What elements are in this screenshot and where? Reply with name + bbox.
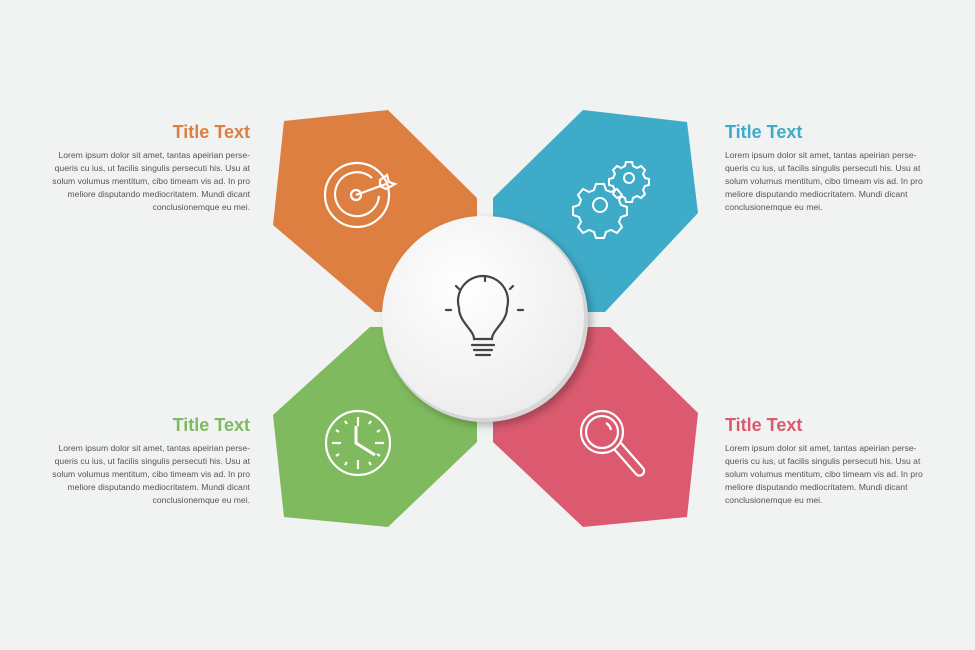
text block: blue: Lorem ipsum dolor sit amet, tantas apeirian perse-queris cu ius, ut facilis singulis persecuti his. Usu at solum volumus mentitum, cibo timeam vis ad. In pro meliore disputando mediocritatem. Mundi dicant conclusionemque eu mei. [725,150,923,212]
text block: green: Lorem ipsum dolor sit amet, tantas apeirian perse-queris cu ius, ut facilis singulis persecuti his. Usu at solum volumus mentitum, cibo timeam vis ad. In pro meliore disputando mediocritatem. Mundi dicant conclusionemque eu mei. [52,443,250,505]
text block: orange: Title Text [173,122,250,142]
text block: orange: Lorem ipsum dolor sit amet, tantas apeirian perse-queris cu ius, ut facilis singulis persecuti his. Usu at solum volumus mentitum, cibo timeam vis ad. In pro meliore disputando mediocritatem. Mundi dicant conclusionemque eu mei. [52,150,250,212]
icon: magnifier [581,411,644,476]
text block: blue: Title Text [725,122,802,142]
panel: orange hexagon [273,110,477,312]
text block: pink [725,415,923,505]
panel: green hexagon [273,327,477,527]
text block: green: Title Text [173,415,250,435]
icon: clock [326,411,390,475]
panel: pink hexagon [493,327,698,527]
icon: target [325,163,395,227]
icon: lightbulb [446,276,523,355]
text block: green [52,415,250,505]
center circle [382,216,588,422]
text block: blue [725,122,923,212]
icon: gears [573,162,649,238]
text block: pink: Lorem ipsum dolor sit amet, tantas apeirian perse-queris cu ius, ut facilis singulis persecuti his. Usu at solum volumus mentitum, cibo timeam vis ad. In pro meliore disputando mediocritatem. Mundi dicant conclusionemque eu mei. [725,443,923,505]
panel: blue hexagon [493,110,698,312]
text block: pink: Title Text [725,415,802,435]
text block: orange [52,122,250,212]
